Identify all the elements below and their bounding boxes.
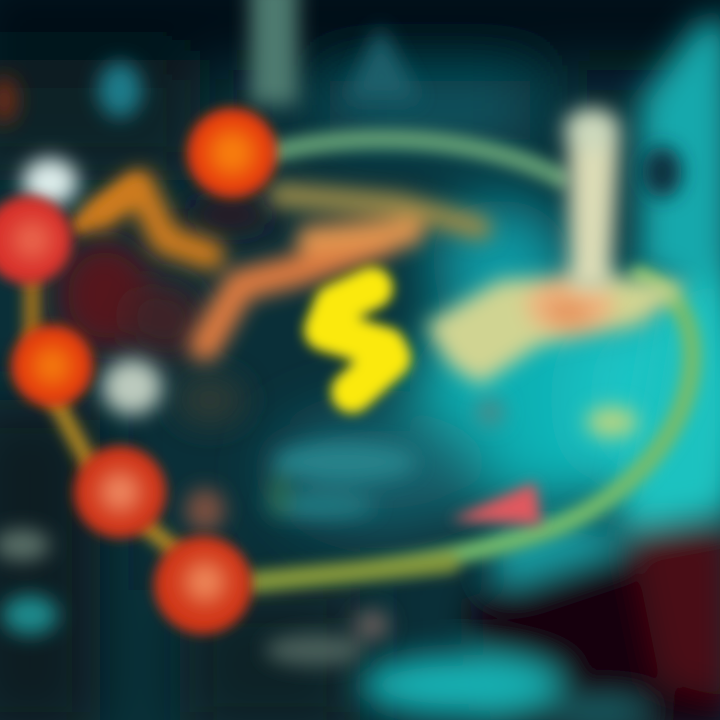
node: bottom red xyxy=(154,536,252,634)
dark maroon cluster xyxy=(57,200,275,425)
node: lower red xyxy=(74,446,166,538)
pale column xyxy=(564,108,620,290)
orange branching paths xyxy=(100,185,480,345)
loop curve xyxy=(255,139,692,582)
icon: yellow dollar-like symbol xyxy=(325,288,390,392)
node: top orange xyxy=(187,108,277,198)
node: middle left orange xyxy=(11,325,93,407)
white dots xyxy=(22,158,162,415)
chain links between nodes xyxy=(32,185,175,550)
pale green-yellow band xyxy=(425,275,690,438)
node: left red xyxy=(0,196,72,284)
red wedge xyxy=(450,482,542,525)
